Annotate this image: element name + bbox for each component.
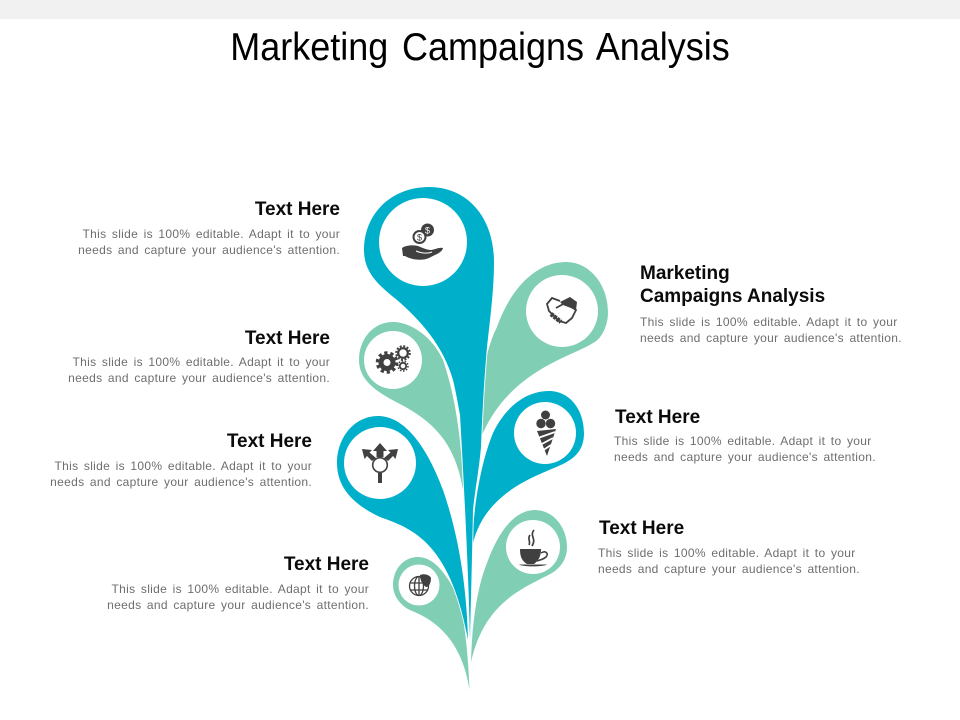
text block: middle right: Text Here [615,407,700,428]
text block: marketing campaigns analysis: This slide is 100% editable. Adapt it to your [640,315,898,329]
petal: top teal [364,187,494,640]
text block: second left: needs and capture your audience's attention. [68,371,330,385]
text block: marketing campaigns analysis: needs and capture your audience's attention. [640,331,902,345]
text block: marketing campaigns analysis: Marketing [640,263,730,284]
text block: lower right: needs and capture your audience's attention. [598,562,860,576]
icon: globe with leaf [410,574,431,596]
text block: third left: This slide is 100% editable. Adapt it to your [54,459,312,473]
icon: direction arrows [362,443,398,483]
text block: third left: Text Here [227,431,312,452]
text block: second left: Text Here [245,328,330,349]
text block: middle right: This slide is 100% editable. Adapt it to your [614,434,872,448]
text block: third left: needs and capture your audience's attention. [50,475,312,489]
petal: middle right teal [472,391,584,545]
top band [0,0,960,19]
text block: marketing campaigns analysis: Campaigns Analysis [640,286,825,307]
text block: bottom left: needs and capture your audience's attention. [107,598,369,612]
petal: upper left green [359,322,463,490]
text block: middle right [614,407,876,464]
icon: gears [378,346,410,372]
title: Marketing Campaigns Analysis [230,26,730,69]
icon: ice cream cone [536,410,556,456]
petal: upper right green [476,262,608,452]
text block: bottom left [107,554,369,612]
text block: top left: This slide is 100% editable. Adapt it to your [82,227,340,241]
text block: lower right: This slide is 100% editable. Adapt it to your [598,546,856,560]
text block: marketing campaigns analysis [640,263,902,345]
petal: middle left teal [337,416,468,640]
icon: handshake [547,297,577,323]
text block: bottom left: This slide is 100% editable. Adapt it to your [112,582,369,596]
text block: lower right [598,518,860,576]
text block: third left [50,431,312,489]
icon: hand with coins [402,224,443,260]
text block: lower right: Text Here [599,518,684,539]
text block: top left: Text Here [255,199,340,220]
text block: second left: This slide is 100% editable. Adapt it to your [72,355,330,369]
icon: hand with coins: $ [417,232,422,242]
petal: lower right green [471,510,567,662]
text block: top left: needs and capture your audience's attention. [78,243,340,257]
text block: middle right: needs and capture your audience's attention. [614,450,876,464]
petal: bottom left green [393,557,470,690]
text block: bottom left: Text Here [284,554,369,575]
icon: coffee cup [519,530,547,566]
text block: top left [78,199,340,257]
icon: hand with coins: $ [425,226,430,236]
text block: second left [68,328,330,385]
